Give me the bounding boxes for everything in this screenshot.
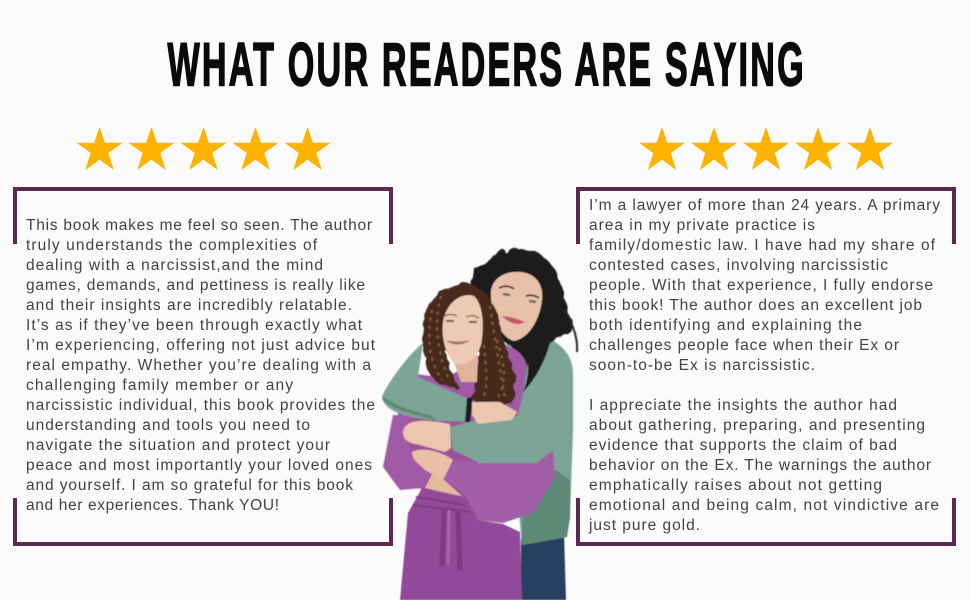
left testimonial text: This book makes me feel so seen. The author: [26, 217, 372, 234]
woman's face: [491, 272, 542, 341]
title: WHAT OUR READERS ARE SAYING: [168, 31, 804, 99]
right testimonial text: people. With that experience, I fully endorse: [589, 277, 933, 294]
left testimonial text: narcissistic individual, this book provides the: [26, 397, 375, 414]
woman's hand: [472, 402, 517, 424]
right testimonial text: just pure gold.: [588, 517, 700, 534]
left testimonial text: I’m experiencing, offering not just advice but: [26, 337, 376, 354]
watch band: [465, 397, 473, 422]
daughter's torso under the arms: [395, 412, 480, 498]
left testimonial text: dealing with a narcissist,and the mind: [26, 257, 323, 274]
right testimonial text: about gathering, preparing, and presenting: [589, 417, 925, 434]
right testimonial text: area in my private practice is: [589, 217, 815, 234]
right five-star rating: [639, 127, 893, 170]
left testimonial text: games, demands, and pettiness is really like: [26, 277, 365, 294]
arm shading: [383, 396, 437, 421]
left testimonial text: truly understands the complexities of: [26, 237, 318, 254]
pants waistband and drawstring: [413, 497, 470, 512]
right testimonial text: I’m a lawyer of more than 24 years. A primary: [589, 197, 940, 214]
woman's jeans: [521, 534, 566, 600]
right testimonial text: this book! The author does an excellent job: [589, 297, 922, 314]
right testimonial text: both identifying and explaining the: [589, 317, 862, 334]
woman's eyes and brows: [499, 286, 539, 298]
woman's green arm wrapped around daughter: [382, 343, 471, 421]
left testimonial text: real empathy. Whether you’re dealing with a: [26, 357, 371, 374]
daughter's eyes and brows: [444, 314, 479, 318]
photo: mother hugging daughter: [382, 250, 577, 600]
right testimonial text: emotional and being calm, not vindictive are: [589, 497, 939, 514]
left testimonial text: and yourself. I am so grateful for this book: [26, 477, 353, 494]
hair curls highlights: [429, 296, 505, 402]
right testimonial text: challenges people face when their Ex or: [589, 337, 899, 354]
daughter's purple hoodie top: [416, 346, 529, 425]
right testimonial text: emphatically raises about not getting: [589, 477, 882, 494]
hair wisps: [524, 310, 577, 392]
right testimonial text: I appreciate the insights the author had: [589, 397, 897, 414]
daughter's hands: [403, 421, 451, 452]
right testimonial frame: [578, 189, 954, 544]
left testimonial text: understanding and tools you need to: [26, 417, 310, 434]
daughter's face: [443, 295, 483, 364]
woman's hair: [472, 250, 572, 384]
right testimonial text: family/domestic law. I have had my share of: [589, 237, 936, 254]
left testimonial text: peace and most importantly your loved ones: [26, 457, 372, 474]
left testimonial text: challenging family member or any: [26, 377, 293, 394]
left testimonial text: and her experiences. Thank YOU!: [26, 497, 279, 514]
woman's smile: [502, 316, 525, 324]
right testimonial text: contested cases, involving narcissistic: [589, 257, 888, 274]
sweatshirt lower shading: [522, 470, 570, 545]
daughter's left sleeve: [383, 415, 433, 490]
hair strand over shoulder: [522, 342, 550, 392]
daughter's neck: [453, 355, 478, 382]
woman's sweatshirt body: [500, 331, 573, 545]
daughter's smile: [447, 341, 469, 344]
right testimonial text: soon-to-be Ex is narcissistic.: [589, 357, 815, 374]
daughter's right sleeve: [442, 450, 555, 523]
left testimonial text: It’s as if they’ve been through exactly what: [26, 317, 363, 334]
midriff: [425, 474, 463, 497]
daughter's pants: [400, 488, 522, 600]
right testimonial text: behavior on the Ex. The warnings the author: [589, 457, 931, 474]
daughter's curly hair: [423, 284, 516, 406]
left testimonial text: and their insights are incredibly relatable.: [26, 297, 352, 314]
right testimonial text: evidence that supports the claim of bad: [589, 437, 897, 454]
right testimonial text: [588, 197, 940, 534]
left testimonial text: [26, 217, 376, 514]
woman's second green forearm: [450, 345, 570, 463]
left testimonial text: navigate the situation and protect your: [26, 437, 330, 454]
left testimonial frame: [15, 189, 391, 544]
left five-star rating: [76, 127, 330, 170]
